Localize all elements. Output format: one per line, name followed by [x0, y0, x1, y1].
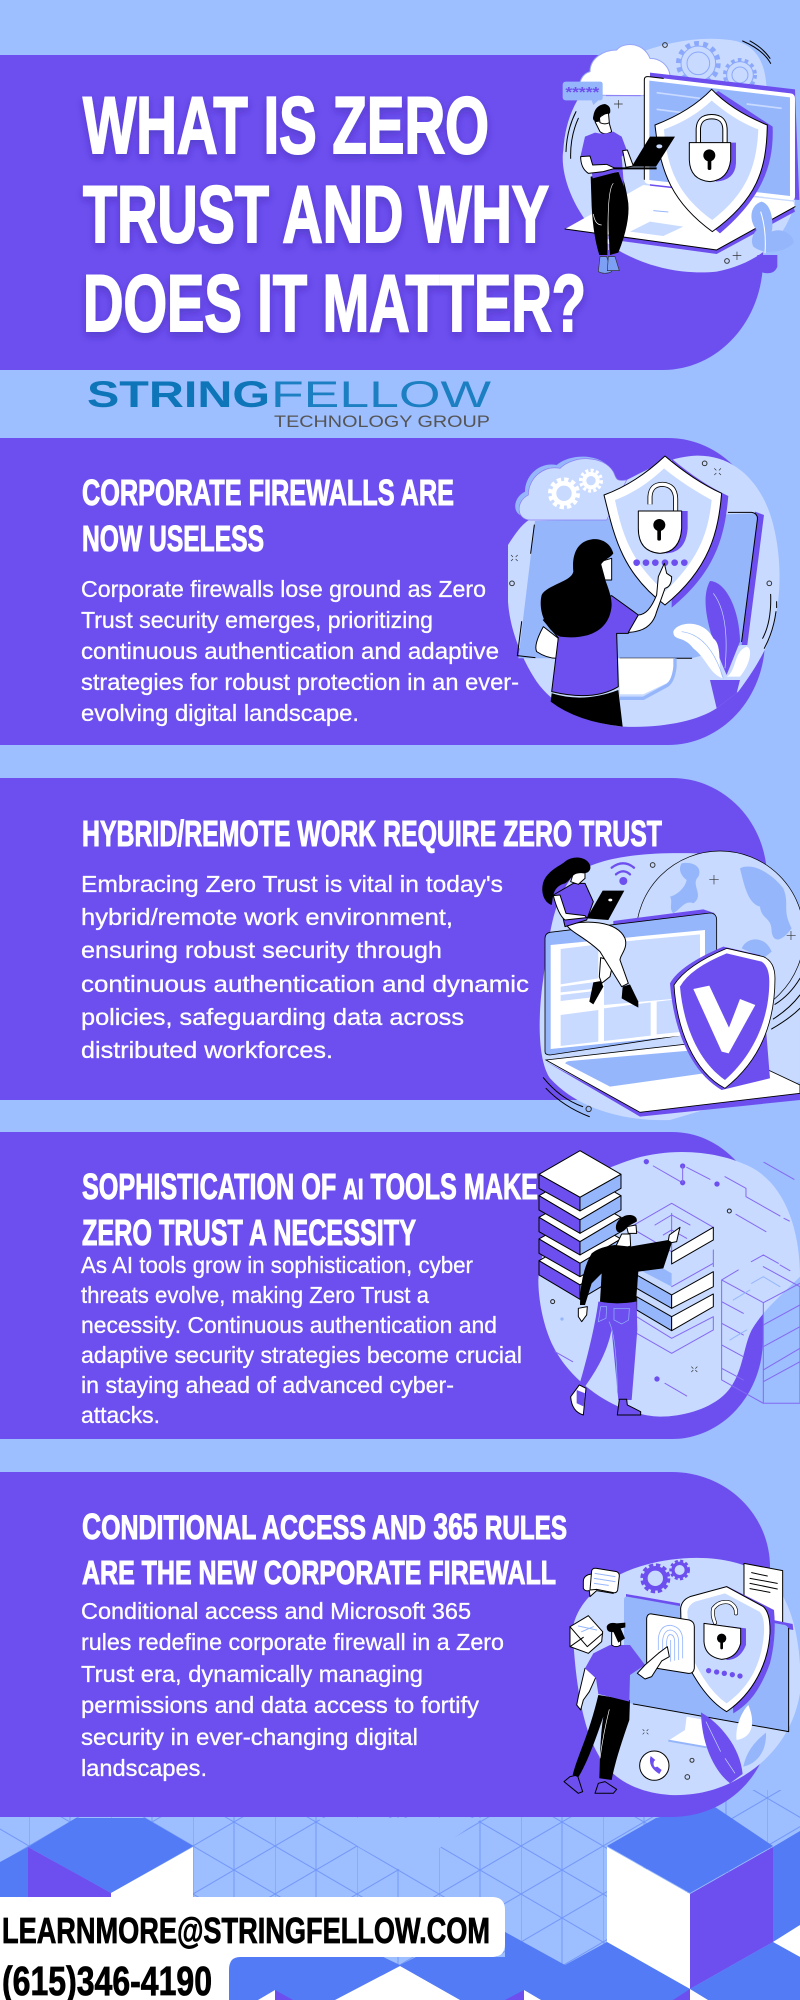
circuit lines [555, 1159, 794, 1396]
title: DOES IT MATTER? [83, 259, 586, 349]
right wireframe boxes [722, 1255, 800, 1403]
section 3 heading [82, 1166, 538, 1253]
plant [751, 202, 793, 273]
section 4 body text: landscapes. [81, 1755, 207, 1781]
title: WHAT IS ZERO [83, 81, 489, 171]
section 3 body text [81, 1252, 522, 1428]
section 4 body text: security in ever-changing digital [81, 1724, 418, 1750]
icon: shield with V [670, 947, 775, 1090]
contact box: email [0, 1897, 505, 1957]
icon: document [744, 1563, 783, 1640]
man pointing [571, 1215, 680, 1415]
icon: fingerprint card [647, 1614, 694, 1673]
panel: title background [0, 55, 763, 370]
icon: gears [642, 1561, 689, 1592]
section 4 body text: rules redefine corporate firewall in a Zero [81, 1629, 504, 1655]
section 3 body text: adaptive security strategies become crucial [81, 1342, 522, 1368]
section 1 body text: Trust security emerges, prioritizing [81, 607, 433, 633]
section 4 heading [82, 1506, 567, 1591]
section 4 body text: permissions and data access to fortify [81, 1692, 480, 1718]
section 3 heading: SOPHISTICATION OF AI TOOLS MAKE [82, 1166, 538, 1207]
section 4 body text [81, 1598, 504, 1781]
laptop screen [545, 909, 717, 1055]
section 2 body text: ensuring robust security through [81, 937, 442, 963]
section 1 heading: CORPORATE FIREWALLS ARE [82, 472, 454, 513]
title: TRUST AND WHY [83, 170, 549, 260]
section 3 heading: ZERO TRUST A NECESSITY [82, 1212, 416, 1253]
title [83, 81, 586, 349]
illustration: laptop, globe and shield [540, 851, 800, 1120]
contact box: email: LEARNMORE@STRINGFELLOW.COM [2, 1910, 490, 1951]
illustration: man with laptop and security shield [563, 39, 799, 273]
illustration: man with data stacks [538, 1151, 800, 1417]
icon: cloud with gears [515, 457, 627, 520]
illustration: woman unlocking shield [508, 456, 780, 727]
panel: hybrid remote work background [0, 778, 767, 1100]
section 1 body text: evolving digital landscape. [81, 700, 359, 726]
left data stack [539, 1151, 621, 1299]
section 1 body text: Corporate firewalls lose ground as Zero [81, 576, 486, 602]
laptop base [546, 1042, 800, 1117]
icon: shield with open padlock [604, 456, 728, 608]
icon: password bubble [563, 82, 603, 105]
section 1 body text [81, 576, 519, 726]
section 4 body text: Trust era, dynamically managing [81, 1661, 423, 1687]
icon: chat bubbles [583, 1568, 619, 1597]
section 1 heading: NOW USELESS [82, 518, 264, 559]
woman sitting with laptop [542, 858, 638, 1008]
section 1 body text: continuous authentication and adaptive [81, 638, 499, 664]
plant [673, 581, 750, 708]
right data stack [630, 1203, 713, 1353]
icon: envelope [570, 1616, 603, 1653]
section 3 body text: threats evolve, making Zero Trust a [81, 1282, 429, 1308]
logo: Stringfellow Technology Group [87, 374, 491, 431]
section 4 heading: ARE THE NEW CORPORATE FIREWALL [82, 1554, 556, 1591]
section 4 heading: CONDITIONAL ACCESS AND 365 RULES [82, 1506, 567, 1547]
logo: Stringfellow Technology Group: STRING [87, 374, 270, 415]
person with laptop [580, 104, 675, 273]
section 1 heading [82, 472, 454, 559]
section 2 body text: policies, safeguarding data across [81, 1004, 464, 1030]
icon: phone [640, 1751, 669, 1780]
panel: conditional access background [0, 1472, 770, 1817]
section 3 body text: attacks. [81, 1402, 160, 1428]
section 2 body text: hybrid/remote work environment, [81, 904, 453, 930]
plant [701, 1705, 766, 1783]
icon: wifi [612, 863, 634, 885]
panel: AI tools background [0, 1132, 763, 1439]
icon: shield with open padlock [681, 1586, 775, 1713]
panel: corporate firewalls background [0, 438, 765, 745]
section 3 body text: in staying ahead of advanced cyber- [81, 1372, 454, 1398]
section 2 body text: distributed workforces. [81, 1037, 333, 1063]
section 4 body text: Conditional access and Microsoft 365 [81, 1598, 471, 1624]
monitor [624, 1594, 793, 1747]
section 3 body text: necessity. Continuous authentication and [81, 1312, 497, 1338]
logo: Stringfellow Technology Group: TECHNOLOGY GROUP [274, 413, 490, 431]
section 2 body text: Embracing Zero Trust is vital in today's [81, 871, 503, 897]
section 2 body text [81, 871, 529, 1063]
icon: shield with padlock [655, 89, 773, 233]
section 3 body text: As AI tools grow in sophistication, cyber [81, 1252, 473, 1278]
illustration: man with fingerprint scanner [564, 1558, 800, 1795]
woman [536, 539, 672, 727]
logo: Stringfellow Technology Group: FELLOW [271, 374, 491, 415]
icon: password bubble: ***** [565, 85, 600, 101]
footer geometric pattern [0, 1790, 800, 2000]
section 1 body text: strategies for robust protection in an ever- [81, 669, 519, 695]
icon: globe [636, 851, 800, 1019]
man [564, 1623, 669, 1793]
section 2 body text: continuous authentication and dynamic [81, 971, 529, 997]
